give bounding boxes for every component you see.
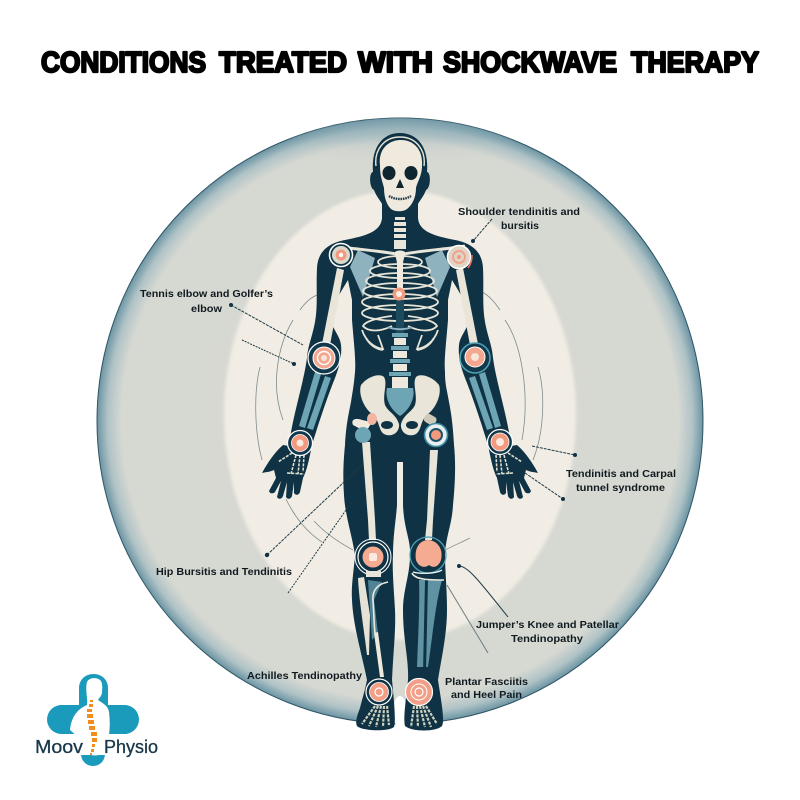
cervical spine (394, 217, 406, 249)
label: knee: Jumper’s Knee and Patellar (476, 619, 619, 631)
title: WITH (358, 47, 433, 79)
femurs (362, 442, 376, 540)
label: hip: Hip Bursitis and Tendinitis (156, 566, 292, 578)
joint marker: sternum (392, 288, 406, 300)
feet bones (362, 706, 437, 727)
title: THERAPY (631, 47, 759, 79)
label: elbow: Tennis elbow and Golfer’s (140, 288, 273, 300)
title: TREATED (219, 47, 347, 79)
joint marker: right hip (423, 413, 448, 446)
logo wordmark: Physio (104, 737, 158, 757)
thin guide arcs around the body (256, 292, 543, 550)
label: achilles: Achilles Tendinopathy (247, 670, 362, 682)
label: plantar: Plantar Fasciitis (445, 676, 528, 688)
joint marker: right shoulder (448, 246, 472, 268)
skeleton (278, 137, 522, 727)
logo: Moov Physio (35, 674, 158, 766)
label: elbow: elbow (191, 303, 223, 315)
leader: patellar (447, 585, 488, 653)
logo wordmark: Moov (35, 737, 83, 757)
leader: wrist (532, 446, 577, 457)
label: plantar: and Heel Pain (451, 689, 522, 701)
leader: shoulder (471, 219, 492, 243)
label: shoulder: bursitis (501, 220, 539, 232)
lower legs (358, 573, 444, 677)
leader: tennis elbow (229, 303, 303, 345)
label: wrist: Tendinitis and Carpal (566, 468, 676, 480)
joint marker: left wrist (288, 430, 312, 456)
joint marker: right ankle (406, 678, 432, 706)
label: knee: Tendinopathy (511, 633, 583, 645)
joint marker: left elbow (308, 342, 340, 374)
leader: hip tendinitis (288, 500, 353, 593)
left hip head (352, 413, 377, 443)
sternum (395, 250, 405, 295)
upper arm bones (322, 268, 344, 345)
logo body (70, 678, 110, 755)
clavicles (335, 246, 465, 254)
leader: golfer's elbow (242, 340, 296, 366)
joint marker: left shoulder (330, 244, 352, 266)
title: CONDITIONS (41, 47, 206, 79)
label: wrist: tunnel syndrome (576, 482, 665, 494)
leader lines (229, 219, 577, 653)
ribs (362, 256, 438, 350)
joint marker: left ankle (366, 679, 392, 705)
joint marker: right wrist (488, 430, 512, 454)
logo spine (87, 700, 97, 755)
leader: carpal tunnel (525, 473, 565, 501)
body silhouette (262, 133, 538, 730)
torso, arms and legs (262, 218, 538, 730)
head (370, 133, 430, 225)
spine (388, 300, 412, 388)
panel: circular background (97, 106, 703, 728)
joint marker: left knee (355, 539, 391, 577)
forearm bones (299, 372, 331, 430)
scapulae (350, 250, 375, 297)
joint marker: right knee (410, 537, 446, 573)
hand bones (278, 453, 522, 474)
title: SHOCKWAVE (443, 47, 617, 79)
leader: jumper's knee (457, 564, 508, 617)
joint marker: right elbow (460, 343, 490, 373)
leader: hip bursitis (265, 465, 362, 557)
pelvis (360, 375, 440, 435)
skull (376, 137, 424, 211)
label: shoulder: Shoulder tendinitis and (458, 206, 580, 218)
logo cross (47, 674, 139, 766)
